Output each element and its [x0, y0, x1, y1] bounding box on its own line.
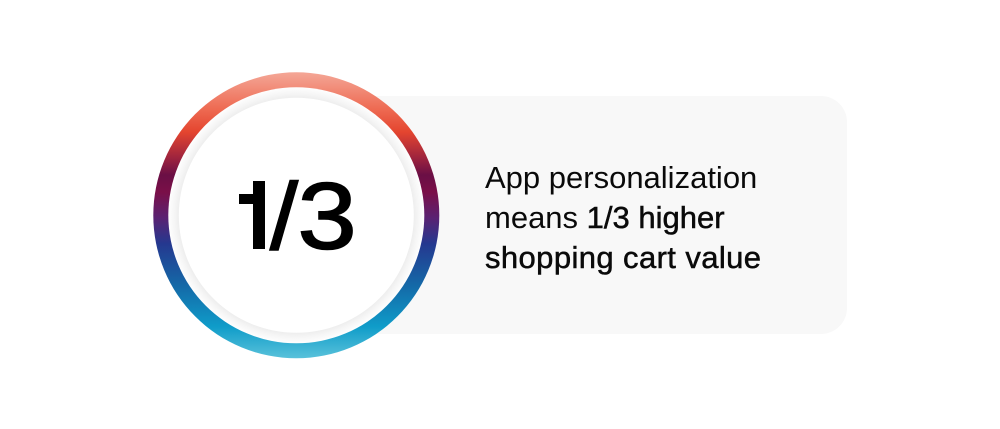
- white centre: [179, 98, 414, 333]
- big figure 1/3: [239, 180, 353, 251]
- text block: statistic description: [485, 160, 761, 275]
- gradient ring: [153, 72, 439, 358]
- big figure 1/3: 1: [232, 164, 285, 270]
- soft grey inner ring: [168, 87, 424, 343]
- big figure 1/3: /: [270, 164, 299, 270]
- ring badge with 1/3 figure: [153, 72, 440, 358]
- text block: statistic description: shopping cart value: [485, 240, 761, 275]
- panel: text background card: [296, 96, 847, 334]
- big figure 1/3: 3: [298, 164, 357, 269]
- text block: statistic description: App personalization: [485, 160, 757, 195]
- text block: statistic description: means 1/3 higher: [485, 200, 725, 235]
